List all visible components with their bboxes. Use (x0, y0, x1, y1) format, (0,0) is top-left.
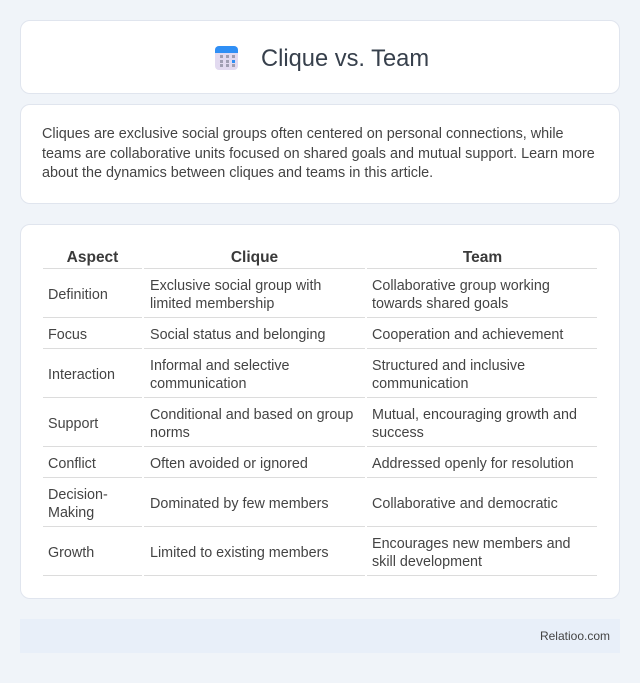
comparison table: Informal and selective (150, 358, 290, 374)
footer bar (20, 619, 620, 653)
row: Growth: Growth (48, 545, 94, 561)
comparison table: Often avoided or ignored (150, 456, 308, 472)
header: Aspect: Aspect (67, 249, 118, 266)
panel: introduction card (20, 104, 620, 204)
comparison table: Dominated by few members (150, 496, 329, 512)
row: Decision-Making: Decision- (48, 487, 108, 503)
comparison table: Exclusive social group with (150, 278, 321, 294)
comparison table: Addressed openly for resolution (372, 456, 574, 472)
comparison table: Collaborative group working (372, 278, 550, 294)
comparison table (43, 249, 597, 576)
row: Conflict: Conflict (48, 456, 96, 472)
panel: comparison table card (20, 224, 620, 599)
comparison table: Collaborative and democratic (372, 496, 558, 512)
comparison table: norms (150, 425, 190, 441)
comparison table: Limited to existing members (150, 545, 329, 561)
row: Interaction: Interaction (48, 367, 115, 383)
comparison table: Cooperation and achievement (372, 327, 563, 343)
introduction text: Cliques are exclusive social groups often centered on personal connections, while (42, 126, 564, 142)
title: Clique vs. Team (261, 46, 429, 72)
icon: calendar (215, 46, 238, 70)
header: Team: Team (463, 249, 502, 266)
comparison table: success (372, 425, 424, 441)
introduction text: teams are collaborative units focused on shared goals and mutual support. Learn more (42, 146, 595, 162)
footer text: Relatioo.com (540, 629, 610, 643)
header: Clique: Clique (231, 249, 278, 266)
comparison table: communication (372, 376, 468, 392)
row: Definition: Definition (48, 287, 108, 303)
row: Decision-Making: Making (48, 505, 94, 521)
comparison table: Encourages new members and (372, 536, 571, 552)
row: Focus: Focus (48, 327, 87, 343)
introduction text: about the dynamics between cliques and teams in this article. (42, 165, 433, 181)
row: Support: Support (48, 416, 98, 432)
row: Decision-Making (48, 487, 108, 521)
comparison table: Structured and inclusive (372, 358, 525, 374)
introduction text (42, 126, 595, 181)
comparison table: Conditional and based on group (150, 407, 353, 423)
comparison table: skill development (372, 554, 482, 570)
comparison table: Social status and belonging (150, 327, 325, 343)
comparison table: Mutual, encouraging growth and (372, 407, 577, 423)
panel: title card (20, 20, 620, 94)
comparison table: communication (150, 376, 246, 392)
comparison table: towards shared goals (372, 296, 508, 312)
comparison table: limited membership (150, 296, 274, 312)
